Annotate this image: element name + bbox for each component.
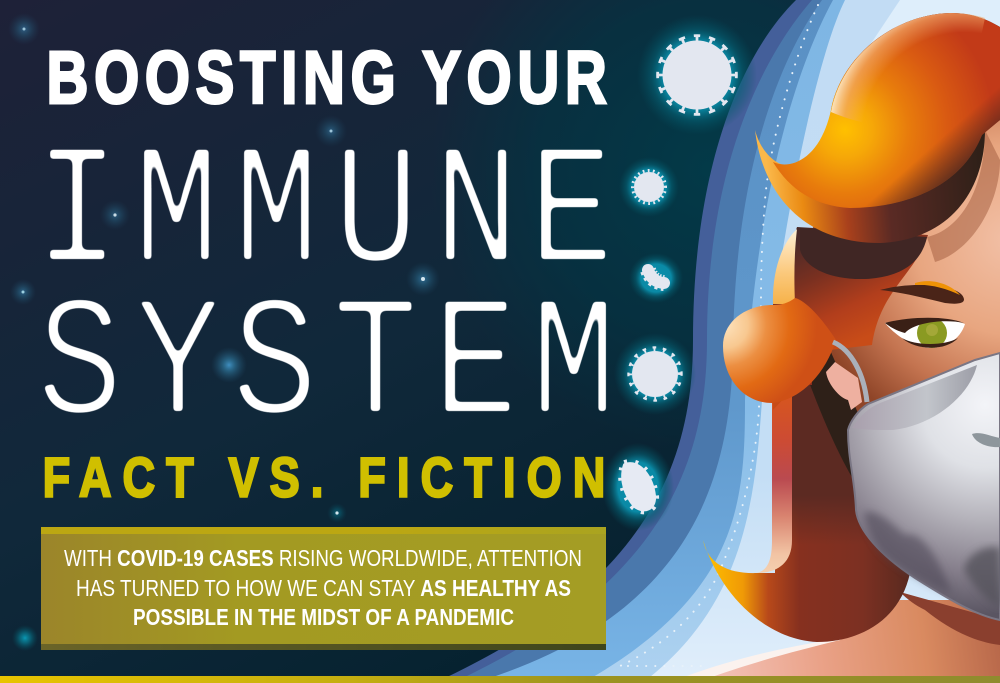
- bottom bar: [0, 676, 1000, 683]
- blue wave layers: [447, 0, 1000, 677]
- hair dark wedge: [800, 345, 860, 484]
- title: system: SYSTEM: [36, 270, 617, 465]
- dotted line: [620, 5, 818, 666]
- eyebrow: [880, 285, 964, 304]
- mask lower shadow: [864, 512, 952, 594]
- intro box: [41, 527, 606, 650]
- hair strip: [757, 385, 792, 573]
- hair shadow block: [800, 228, 927, 279]
- mask strap: [833, 342, 867, 402]
- nose shadow: [972, 433, 1000, 447]
- virus: small: [619, 157, 679, 217]
- intro text line 2: HAS TURNED TO HOW WE CAN STAY AS HEALTHY AS: [76, 575, 571, 601]
- shadow of hair on face: [927, 130, 1000, 262]
- background specks: [8, 13, 440, 651]
- pale hair lock: [773, 229, 797, 304]
- top hair lobe: [755, 13, 1000, 243]
- face mask: [848, 353, 1000, 620]
- mask shaded fold: [852, 365, 977, 430]
- portrait of woman with mask: [684, 13, 1000, 677]
- eye: [885, 318, 965, 348]
- title: boosting your: BOOSTING YOUR: [47, 37, 607, 120]
- virus: fragment: [629, 253, 683, 303]
- subtitle: fact vs fiction: FACT VS. FICTION: [43, 446, 605, 509]
- title: immune: IMMUNE: [34, 118, 615, 313]
- left hair lobe: [723, 298, 836, 403]
- face: [800, 120, 1000, 440]
- intro text line 1: WITH COVID-19 CASES RISING WORLDWIDE, ATTENTION: [64, 545, 582, 571]
- middle hair: [773, 227, 928, 410]
- mask lower right shadow: [964, 547, 1000, 608]
- hair side panel: [772, 355, 812, 385]
- hair mid shade: [792, 380, 885, 545]
- intro text line 3: POSSIBLE IN THE MIDST OF A PANDEMIC: [133, 604, 514, 630]
- virus: medium: [614, 333, 696, 415]
- back hair: [703, 380, 910, 642]
- virus: large: [637, 15, 757, 135]
- virus: half: [602, 443, 674, 531]
- neck and chest: [684, 592, 1000, 677]
- ear: [826, 362, 862, 410]
